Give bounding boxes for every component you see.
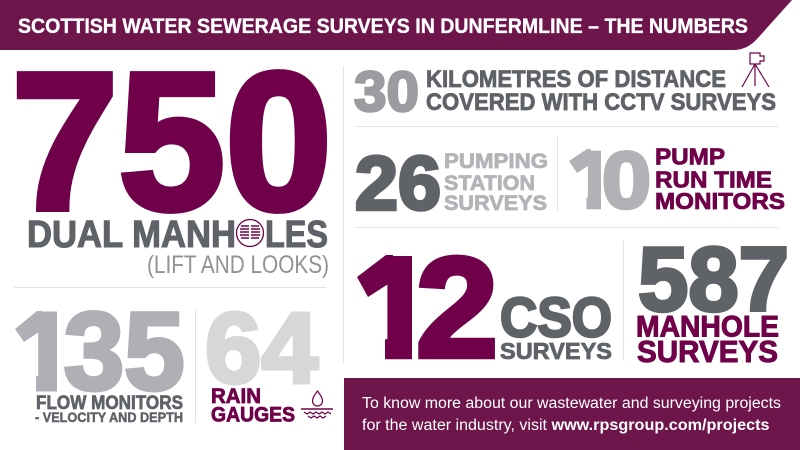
label: CCTV distance: COVERED WITH CCTV SURVEYS [426,89,776,116]
number 135 [15,310,184,392]
number 26: 26 [355,142,441,226]
label: manhole surveys: MANHOLE [636,310,779,344]
label: rain gauges [211,385,295,426]
panel: call to action footer [344,378,800,450]
label: pump run time monitors [655,144,785,214]
label: pumping station surveys [444,149,548,215]
panel: pumping station surveys [355,142,548,226]
panel: CCTV kilometres [354,53,776,124]
panel: dual manholes [12,32,332,279]
label: pumping station surveys: STATION [444,171,535,195]
label: rain gauges: RAIN [211,385,261,408]
label: CSO: CSO [500,286,612,348]
label: pump run time monitors: RUN TIME [655,166,772,192]
icon: camera on tripod [742,53,769,87]
label: flow monitors: FLOW MONITORS [36,393,183,414]
number 10: 0 [602,136,651,224]
label: lift and looks: (LIFT AND LOOKS) [147,251,329,279]
number 135: 35 [64,290,185,414]
title banner: SCOTTISH WATER SEWERAGE SURVEYS IN DUNFERMLINE – THE NUMBERS [18,15,748,38]
icon: manhole cover [236,220,264,246]
number 587: 587 [638,230,789,330]
label: pump run time monitors: MONITORS [655,188,785,214]
panel: CSO surveys [357,254,612,360]
number 12 [357,254,495,360]
panel: pump run time monitors [569,148,784,210]
panel: rain gauges [205,292,333,426]
label: dual manholes: LES [265,214,328,256]
label: CCTV distance: KILOMETRES OF DISTANCE [426,66,726,93]
label: dual manholes: DUAL MANH [27,214,236,256]
icon: water drop [301,391,333,418]
label: velocity and depth: - VELOCITY AND DEPTH [35,409,183,425]
number 12: 2 [416,228,498,388]
label: manhole surveys: SURVEYS [637,334,778,369]
label: manhole surveys [636,310,779,369]
number 64: 64 [205,292,318,404]
number 135: 1 [15,290,76,414]
label: CCTV distance [426,66,776,116]
panel: manhole surveys [636,230,789,369]
footer text [362,395,781,434]
number 12: 1 [357,228,436,388]
footer text: www.rpsgroup.com/projects [550,417,770,434]
label: rain gauges: GAUGES [211,404,295,426]
number 10 [569,149,650,210]
label: pumping station surveys: PUMPING [444,149,548,173]
number 30: 30 [354,60,419,124]
label: pump run time monitors: PUMP [655,144,725,170]
title banner [0,0,792,50]
footer text: To know more about our wastewater and surveying projects [362,395,781,412]
big number 750: 750 [12,32,332,251]
panel: flow monitors [15,310,184,422]
number 10: 1 [571,136,616,224]
footer text: for the water industry, visit [362,417,548,434]
label: surveys: SURVEYS [500,338,612,364]
label: pumping station surveys: SURVEYS [444,191,547,215]
